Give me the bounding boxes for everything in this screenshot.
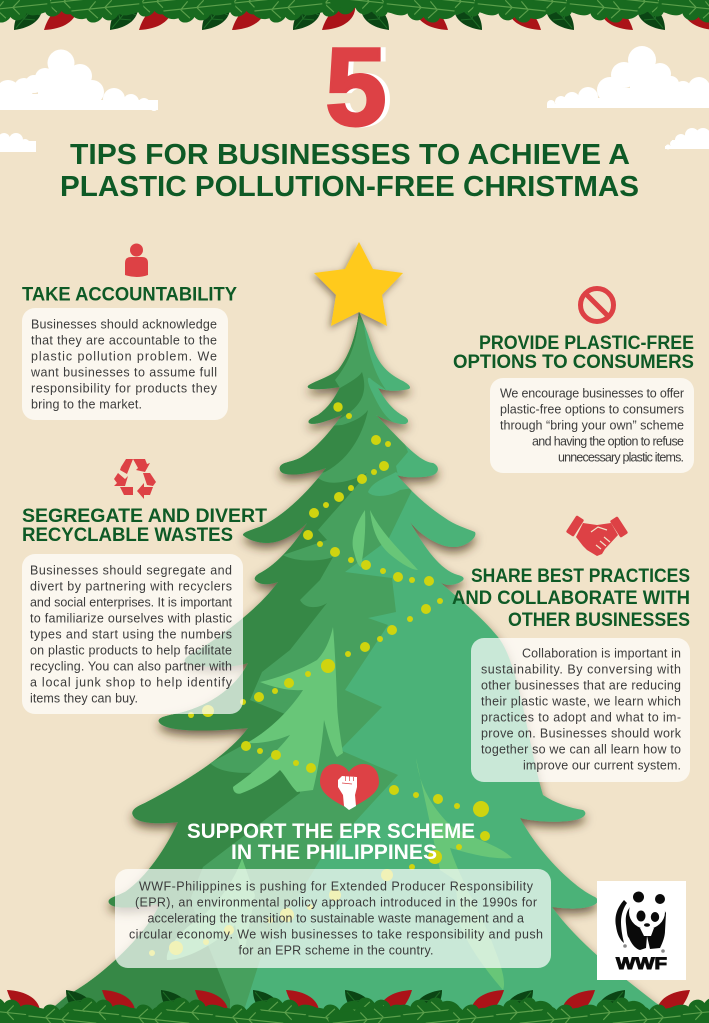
card: segregate and divert text: to familiarize ourselves with plastic [30, 612, 232, 626]
card: segregate and divert text: recycling. You can also partner with [30, 660, 232, 674]
heading: take accountability: TAKE ACCOUNTABILITY [22, 284, 237, 306]
bottom garland [0, 990, 709, 1023]
icon: heart with raised fist [320, 764, 379, 810]
card: EPR text [115, 869, 551, 968]
cloud: large left [0, 50, 158, 111]
heading: share best practices [452, 565, 690, 631]
card: EPR text: (EPR), an environmental policy approach introduced in the 1990s for [135, 896, 537, 910]
card: segregate and divert text: items they can buy. [30, 692, 138, 706]
cloud: small right [665, 128, 709, 150]
star [314, 242, 403, 326]
heading: share best practices: AND COLLABORATE WITH [452, 587, 690, 609]
card: take accountability text: want businesses to assume full [30, 366, 217, 380]
heading: share best practices: SHARE BEST PRACTICES [471, 565, 690, 587]
card: EPR text: for an EPR scheme in the country. [238, 944, 434, 958]
icon: prohibition sign [580, 288, 614, 322]
card: share best practices text: Collaboration is important in [522, 646, 681, 660]
title number 5: 5 [325, 26, 387, 149]
heading: segregate and divert [22, 505, 267, 546]
card: segregate and divert text: on plastic products to help facilitate [30, 644, 232, 658]
card: EPR text: circular economy. We wish businesses to take responsibility and push [129, 928, 543, 942]
heading: segregate and divert: SEGREGATE AND DIVERT [22, 505, 267, 527]
heading: support the EPR scheme [187, 820, 475, 864]
panel: share best practices [452, 515, 690, 782]
card: segregate and divert text: Businesses should segregate and [30, 564, 232, 578]
top garland [0, 0, 709, 30]
card: plastic-free options text: unnecessary plastic items. [558, 450, 684, 464]
cloud: large right [547, 46, 709, 108]
card: plastic-free options text: We encourage businesses to offer [500, 386, 684, 400]
cloud: small left [0, 133, 36, 152]
icon: person [125, 244, 148, 277]
card: take accountability text: responsibility for products they [31, 382, 218, 396]
card: share best practices text [471, 638, 690, 782]
card: segregate and divert text: and social enterprises. It is important [30, 596, 233, 610]
card: take accountability text: plastic pollution problem. We [31, 350, 217, 364]
heading: provide plastic-free options [453, 332, 694, 373]
heading: provide plastic-free options: PROVIDE PLASTIC-FREE [479, 332, 694, 354]
christmas tree [51, 312, 660, 1010]
card: take accountability text: that they are accountable to the [31, 334, 217, 348]
card: share best practices text: other businesses that are reducing [481, 678, 681, 692]
title [60, 139, 639, 203]
panel: segregate and divert [22, 459, 267, 714]
heading: support the EPR scheme: IN THE PHILIPPINES [231, 841, 437, 864]
card: share best practices text: practices to adopt and what to im- [481, 710, 681, 724]
icon: recycling arrows [114, 459, 156, 499]
logo: WWF panda: WWF [616, 954, 667, 973]
card: EPR text: accelerating the transition to sustainable waste management and a [148, 912, 524, 926]
title: PLASTIC POLLUTION-FREE CHRISTMAS [60, 171, 639, 203]
panel: plastic-free options [453, 288, 694, 473]
logo: WWF panda [597, 881, 686, 980]
panel: take accountability [22, 244, 237, 420]
card: share best practices text: their plastic waste, we learn which [481, 694, 681, 708]
heading: share best practices: OTHER BUSINESSES [508, 609, 690, 631]
card: plastic-free options text [490, 378, 694, 473]
card: segregate and divert text: divert by partnering with recyclers [30, 580, 232, 594]
card: segregate and divert text [22, 554, 243, 714]
title: TIPS FOR BUSINESSES TO ACHIEVE A [70, 139, 630, 171]
card: EPR text: WWF-Philippines is pushing for Extended Producer Responsibility [139, 880, 534, 894]
card: segregate and divert text: types and start using the numbers [30, 628, 232, 642]
card: share best practices text: prove on. Businesses should work [481, 726, 682, 740]
panel: support the EPR scheme [115, 764, 551, 968]
card: take accountability text: Businesses should acknowledge [31, 318, 217, 332]
card: segregate and divert text: a local junk shop to help identify [30, 676, 233, 690]
garland lights [149, 402, 490, 956]
card: share best practices text: together so we can all learn how to [481, 742, 681, 756]
heading: segregate and divert: RECYCLABLE WASTES [22, 524, 233, 546]
card: take accountability text: bring to the market. [31, 398, 142, 412]
card: plastic-free options text: and having the option to refuse [532, 434, 684, 448]
card: share best practices text: sustainability. By conversing with [481, 662, 681, 676]
card: take accountability text [22, 308, 228, 420]
title number 5: 5 [330, 26, 392, 149]
card: plastic-free options text: through “bring your own” scheme [500, 418, 684, 432]
icon: handshake [566, 515, 628, 556]
heading: support the EPR scheme: SUPPORT THE EPR SCHEME [187, 820, 475, 843]
card: plastic-free options text: plastic-free options to consumers [500, 402, 684, 416]
card: share best practices text: improve our current system. [523, 758, 681, 772]
heading: provide plastic-free options: OPTIONS TO CONSUMERS [453, 351, 694, 373]
